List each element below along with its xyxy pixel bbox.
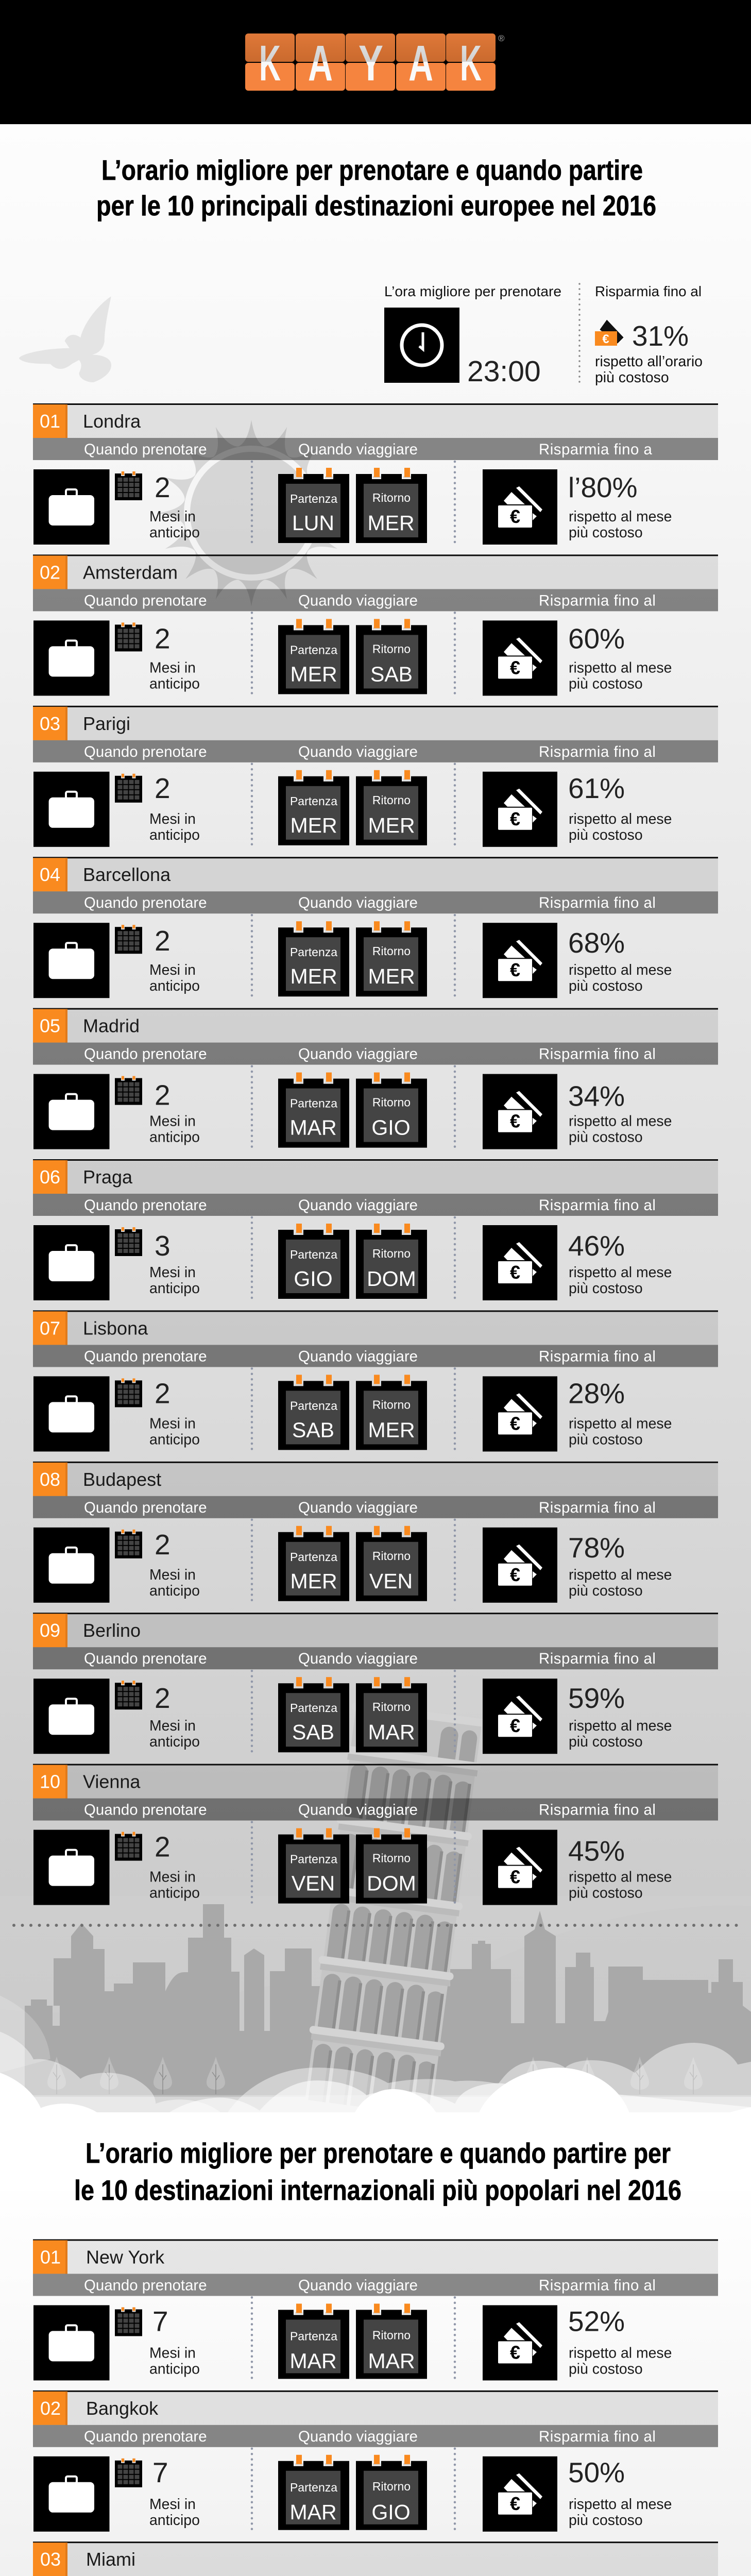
illustration: clouds: [0, 2031, 751, 2191]
when to book: [33, 1074, 200, 1149]
savings: €: [510, 1715, 520, 1736]
when to travel: DOM: [367, 1872, 416, 1895]
city: Bangkok: [86, 2398, 159, 2419]
column headings: Quando viaggiare: [298, 1650, 418, 1667]
when to travel: MER: [290, 1569, 337, 1593]
column headings: [84, 1046, 656, 1063]
column headings: [84, 1802, 656, 1819]
savings: €: [510, 2342, 520, 2363]
savings: [483, 620, 672, 696]
savings: [483, 772, 672, 847]
when to travel: GIO: [371, 1116, 411, 1140]
savings: [483, 469, 672, 545]
savings: 61%: [568, 772, 625, 804]
row: Europe 08 Budapest: [33, 1462, 718, 1603]
when to book: anticipo: [149, 1885, 200, 1902]
city: Miami: [86, 2549, 135, 2570]
city: Londra: [83, 411, 141, 432]
row: Europe 01 Londra: [33, 403, 718, 545]
savings: [483, 923, 672, 998]
when to travel: MER: [290, 662, 337, 686]
city: Berlino: [83, 1620, 141, 1641]
savings: [483, 1376, 672, 1451]
when to travel: MER: [290, 814, 337, 837]
column headings: Risparmia fino al: [539, 592, 656, 609]
row: Europe 03 Parigi: [33, 706, 718, 847]
when to travel: [278, 1224, 427, 1299]
column headings: [84, 1499, 656, 1516]
column headings: Quando prenotare: [84, 441, 207, 458]
savings: [483, 1225, 672, 1300]
when to travel: MER: [367, 511, 415, 535]
when to travel: MAR: [289, 1116, 337, 1140]
savings: rispetto al mese: [569, 1415, 672, 1432]
header bar: [0, 0, 751, 124]
savings: più costoso: [569, 1583, 643, 1599]
savings: più costoso: [569, 1129, 643, 1146]
when to travel: Partenza: [290, 1248, 337, 1261]
savings: più costoso: [569, 827, 643, 843]
column headings: [84, 1197, 656, 1214]
column headings: Risparmia fino al: [539, 894, 656, 911]
when to book: [33, 1528, 200, 1603]
when to travel: Ritorno: [372, 1096, 411, 1109]
when to book: Mesi in: [149, 1869, 196, 1886]
title: section 1: per le 10 principali destinazioni europee nel 2016: [96, 190, 656, 222]
when to book: anticipo: [149, 2361, 200, 2377]
when to travel: [278, 2303, 427, 2379]
savings: €: [510, 2493, 520, 2514]
savings: [483, 2456, 672, 2532]
when to book: 2: [155, 1831, 170, 1863]
column headings: Risparmia fino al: [539, 1197, 656, 1214]
savings: più costoso: [569, 1734, 643, 1750]
when to book: 2: [155, 622, 170, 654]
savings: 59%: [568, 1682, 625, 1714]
when to travel: Partenza: [290, 794, 337, 808]
savings: rispetto al mese: [569, 1869, 672, 1886]
when to travel: Ritorno: [372, 2480, 411, 2493]
panel: save up to 31%: 31%: [632, 320, 689, 352]
savings: più costoso: [569, 2512, 643, 2529]
when to book: 3: [155, 1230, 170, 1262]
rank: 09: [40, 1620, 60, 1641]
column headings: Quando prenotare: [84, 1650, 207, 1667]
when to travel: MAR: [289, 2500, 337, 2524]
column headings: [84, 743, 656, 760]
when to book: Mesi in: [149, 2496, 196, 2513]
column headings: Risparmia fino al: [539, 1348, 656, 1365]
savings: 52%: [568, 2305, 625, 2337]
when to travel: Partenza: [290, 1399, 337, 1412]
when to travel: [278, 2455, 427, 2530]
city: Budapest: [83, 1469, 161, 1490]
column headings: Quando prenotare: [84, 894, 207, 911]
when to travel: [278, 1828, 427, 1904]
when to book: 2: [155, 1079, 170, 1111]
when to travel: GIO: [371, 2500, 411, 2524]
savings: rispetto al mese: [569, 1113, 672, 1130]
savings: €: [510, 1564, 520, 1585]
column headings: Quando viaggiare: [298, 2428, 418, 2445]
KAYAK logo: A: [308, 35, 333, 91]
when to book: Mesi in: [149, 509, 196, 525]
when to book: anticipo: [149, 675, 200, 692]
savings: più costoso: [569, 1885, 643, 1902]
title: section 2: [74, 2137, 681, 2206]
when to travel: Ritorno: [372, 1852, 411, 1865]
savings: 34%: [568, 1080, 625, 1112]
savings: 78%: [568, 1532, 625, 1564]
when to book: anticipo: [149, 524, 200, 541]
column headings: Quando viaggiare: [298, 592, 418, 609]
KAYAK logo: A: [408, 35, 433, 91]
when to travel: [278, 1677, 427, 1752]
when to travel: MER: [368, 1418, 415, 1442]
illustration: trees: [47, 2057, 703, 2094]
savings: 45%: [568, 1835, 625, 1867]
when to book: Mesi in: [149, 1415, 196, 1432]
KAYAK logo: Y: [359, 35, 383, 91]
row: World 01 New York: [33, 2239, 718, 2380]
savings: più costoso: [569, 524, 643, 541]
savings: [483, 1074, 672, 1149]
rank: 10: [40, 1771, 60, 1792]
panel: best time to book: [384, 283, 561, 388]
column headings: Quando prenotare: [84, 1348, 207, 1365]
page background: first section: [0, 124, 751, 2113]
when to travel: [278, 770, 427, 845]
savings: l’80%: [568, 471, 638, 503]
when to travel: Partenza: [290, 945, 337, 959]
rank: 04: [40, 864, 60, 885]
column headings: Quando prenotare: [84, 1046, 207, 1063]
when to travel: Partenza: [290, 643, 337, 656]
when to book: anticipo: [149, 1431, 200, 1448]
city: Madrid: [83, 1015, 140, 1037]
when to book: Mesi in: [149, 659, 196, 676]
column headings: Quando prenotare: [84, 2428, 207, 2445]
column headings: Quando viaggiare: [298, 1197, 418, 1214]
column headings: Quando viaggiare: [298, 2277, 418, 2294]
savings: [483, 1679, 672, 1754]
row: World 02 Bangkok: [33, 2391, 718, 2532]
when to book: Mesi in: [149, 1264, 196, 1281]
when to travel: Ritorno: [372, 1700, 411, 1714]
rank: 02: [40, 2398, 61, 2419]
savings: 68%: [568, 927, 625, 959]
when to travel: Partenza: [290, 1701, 337, 1715]
when to travel: MER: [368, 964, 415, 988]
savings: €: [510, 1262, 520, 1283]
when to book: 7: [152, 2305, 168, 2337]
column headings: [84, 592, 656, 609]
when to book: Mesi in: [149, 1718, 196, 1734]
when to travel: MAR: [289, 2349, 337, 2372]
column headings: Risparmia fino al: [539, 2428, 656, 2445]
column headings: [84, 1348, 656, 1365]
when to travel: Ritorno: [372, 1398, 411, 1411]
when to travel: [278, 921, 427, 996]
when to travel: Partenza: [290, 1853, 337, 1866]
column headings: Risparmia fino al: [539, 1499, 656, 1516]
icon: pigeon illustration: [19, 296, 111, 382]
city: Amsterdam: [83, 562, 178, 583]
rank: 07: [40, 1317, 60, 1338]
city: Vienna: [83, 1771, 141, 1792]
when to book: 2: [155, 1682, 170, 1714]
when to book: [33, 1225, 200, 1300]
savings: €: [510, 506, 520, 527]
when to travel: [278, 1375, 427, 1450]
row: Europe 06 Praga: [33, 1159, 718, 1300]
column headings: Quando viaggiare: [298, 894, 418, 911]
row: Europe 02 Amsterdam: [33, 554, 718, 696]
row: Europe 10 Vienna: [33, 1764, 718, 1905]
savings: più costoso: [569, 1431, 643, 1448]
when to travel: Partenza: [290, 2481, 337, 2494]
savings: [483, 1528, 672, 1603]
page background: second section: [0, 2112, 751, 2576]
illustration: sun behind first rows: [158, 420, 345, 606]
savings: più costoso: [569, 675, 643, 692]
column headings: [84, 894, 656, 911]
panel: save up to 31%: €: [602, 332, 609, 346]
rank: 05: [40, 1015, 60, 1037]
panel: save up to 31%: più costoso: [595, 369, 669, 386]
column headings: Quando prenotare: [84, 1802, 207, 1819]
savings: rispetto al mese: [569, 2345, 672, 2361]
when to book: anticipo: [149, 1734, 200, 1750]
when to book: anticipo: [149, 1583, 200, 1599]
when to travel: Partenza: [290, 2329, 337, 2343]
when to travel: DOM: [367, 1267, 416, 1291]
savings: più costoso: [569, 978, 643, 994]
illustration: leaning tower of Pisa: [300, 1702, 487, 2116]
column headings: Risparmia fino al: [539, 2277, 656, 2294]
when to book: [33, 1376, 200, 1451]
when to book: [33, 2456, 200, 2532]
when to travel: Ritorno: [372, 642, 411, 655]
column headings: Quando viaggiare: [298, 1046, 418, 1063]
savings: 28%: [568, 1377, 625, 1409]
when to book: Mesi in: [149, 2345, 196, 2361]
when to travel: LUN: [292, 511, 334, 535]
savings: €: [510, 1867, 520, 1888]
when to book: Mesi in: [149, 1113, 196, 1130]
when to travel: Ritorno: [372, 1247, 411, 1260]
when to book: Mesi in: [149, 1567, 196, 1583]
KAYAK logo: [245, 33, 505, 91]
column headings: [84, 1650, 656, 1667]
savings: 50%: [568, 2456, 625, 2488]
rank: 03: [40, 713, 60, 734]
column headings: [84, 2277, 656, 2294]
savings: 60%: [568, 622, 625, 654]
savings: €: [510, 808, 520, 829]
column headings: Quando viaggiare: [298, 1499, 418, 1516]
column headings: Quando prenotare: [84, 743, 207, 760]
savings: rispetto al mese: [569, 1567, 672, 1583]
row: Europe 07 Lisbona: [33, 1310, 718, 1451]
when to book: 2: [155, 1377, 170, 1409]
column headings: Quando prenotare: [84, 1499, 207, 1516]
when to book: [33, 1679, 200, 1754]
column headings: Quando viaggiare: [298, 743, 418, 760]
when to book: [33, 772, 200, 847]
when to book: anticipo: [149, 1280, 200, 1297]
panel: save up to 31%: rispetto all’orario: [595, 353, 703, 370]
panel: best time to book: L’ora migliore per prenotare: [384, 283, 561, 299]
panel: best time to book: 23:00: [467, 355, 541, 388]
rank: 03: [40, 2549, 61, 2570]
savings: rispetto al mese: [569, 811, 672, 827]
when to travel: MAR: [368, 2349, 415, 2372]
savings: [483, 1830, 672, 1905]
when to book: [33, 469, 200, 545]
when to travel: SAB: [370, 662, 413, 686]
illustration: Pisa skyline: [0, 1896, 751, 2097]
when to book: [33, 620, 200, 696]
title: section 1: L’orario migliore per prenotare e quando partire: [101, 154, 643, 186]
column headings: Risparmia fino al: [539, 1650, 656, 1667]
column headings: Quando prenotare: [84, 592, 207, 609]
when to travel: Ritorno: [372, 1549, 411, 1563]
when to book: 2: [155, 772, 170, 804]
savings: rispetto al mese: [569, 509, 672, 525]
when to travel: [278, 468, 427, 543]
column headings: [84, 441, 653, 458]
row: Europe 04 Barcellona: [33, 857, 718, 998]
when to book: 2: [155, 925, 170, 957]
row: World 03 Miami: [33, 2541, 718, 2576]
panel: save up to 31%: [595, 283, 703, 386]
column headings: Quando viaggiare: [298, 1802, 418, 1819]
savings: rispetto al mese: [569, 659, 672, 676]
when to travel: [278, 1073, 427, 1148]
when to travel: Ritorno: [372, 2328, 411, 2342]
when to travel: Partenza: [290, 1550, 337, 1564]
city: Parigi: [83, 713, 130, 734]
when to book: anticipo: [149, 978, 200, 994]
savings: [483, 2305, 672, 2380]
when to book: 2: [155, 1529, 170, 1561]
rank: 01: [40, 411, 60, 432]
savings: rispetto al mese: [569, 1264, 672, 1281]
when to travel: SAB: [292, 1720, 334, 1744]
when to travel: [278, 1526, 427, 1601]
when to book: anticipo: [149, 2512, 200, 2529]
column headings: [84, 2428, 656, 2445]
KAYAK logo: K: [259, 35, 281, 91]
when to travel: Ritorno: [372, 944, 411, 958]
column headings: Risparmia fino al: [539, 1046, 656, 1063]
when to travel: Ritorno: [372, 793, 411, 807]
when to travel: GIO: [294, 1267, 333, 1291]
rank: 02: [40, 562, 60, 583]
section divider dotted line: [14, 1924, 738, 1927]
when to travel: VEN: [369, 1569, 413, 1593]
city: Barcellona: [83, 864, 171, 885]
city: Lisbona: [83, 1317, 148, 1338]
savings: 46%: [568, 1230, 625, 1262]
when to travel: Ritorno: [372, 491, 411, 504]
savings: più costoso: [569, 1280, 643, 1297]
when to book: 7: [152, 2456, 168, 2488]
savings: €: [510, 657, 520, 678]
when to book: anticipo: [149, 827, 200, 843]
column headings: Risparmia fino a: [539, 441, 653, 458]
savings: €: [510, 959, 520, 980]
when to travel: SAB: [292, 1418, 334, 1442]
when to travel: Partenza: [290, 492, 337, 505]
KAYAK logo: K: [460, 35, 482, 91]
city: Praga: [83, 1166, 133, 1188]
when to book: anticipo: [149, 1129, 200, 1146]
when to travel: VEN: [292, 1872, 335, 1895]
rank: 01: [40, 2246, 61, 2267]
panel: save up to 31%: Risparmia fino al: [595, 283, 702, 299]
when to travel: MER: [368, 814, 415, 837]
column headings: Quando prenotare: [84, 2277, 207, 2294]
when to book: Mesi in: [149, 962, 196, 978]
when to book: Mesi in: [149, 811, 196, 827]
when to book: [33, 923, 200, 998]
title: section 1: [96, 154, 656, 222]
when to book: [33, 2305, 200, 2380]
when to travel: Partenza: [290, 1097, 337, 1110]
row: Europe 09 Berlino: [33, 1613, 718, 1754]
when to book: 2: [155, 471, 170, 503]
column headings: Risparmia fino al: [539, 1802, 656, 1819]
savings: rispetto al mese: [569, 2496, 672, 2513]
savings: rispetto al mese: [569, 962, 672, 978]
KAYAK logo: ®: [498, 33, 505, 43]
savings: rispetto al mese: [569, 1718, 672, 1734]
column headings: Risparmia fino al: [539, 743, 656, 760]
savings: €: [510, 1413, 520, 1434]
rank: 06: [40, 1166, 60, 1188]
when to book: [33, 1830, 200, 1905]
column headings: Quando viaggiare: [298, 441, 418, 458]
when to travel: MAR: [368, 1720, 415, 1744]
savings: più costoso: [569, 2361, 643, 2377]
rank: 08: [40, 1469, 60, 1490]
row: Europe 05 Madrid: [33, 1008, 718, 1149]
when to travel: MER: [290, 964, 337, 988]
city: New York: [86, 2246, 165, 2267]
column headings: Quando prenotare: [84, 1197, 207, 1214]
when to travel: [278, 619, 427, 694]
column headings: Quando viaggiare: [298, 1348, 418, 1365]
savings: €: [510, 1111, 520, 1132]
